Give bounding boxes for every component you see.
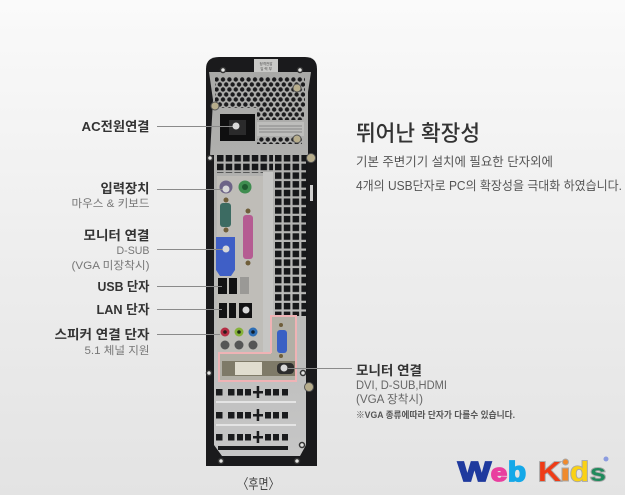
audio jacks <box>220 328 230 336</box>
label: input devices <box>72 181 230 210</box>
logo: Web Kids: e <box>491 460 507 487</box>
I/O panel <box>217 176 263 352</box>
logo: Web Kids: d <box>570 456 589 487</box>
label: LAN: LAN 단자 <box>96 302 150 317</box>
onboard VGA cover <box>216 237 235 276</box>
description: 기본 주변기기 설치에 필요한 단자외에 <box>356 155 553 169</box>
label: card monitor output: 모니터 연결 <box>356 363 422 378</box>
label: USB <box>98 279 222 294</box>
logo: Web Kids: K <box>538 456 561 487</box>
HDMI cover <box>277 363 294 374</box>
card VGA port <box>277 330 287 353</box>
USB ports bottom <box>219 303 227 318</box>
AC socket <box>220 114 255 141</box>
logo: Web Kids: b <box>508 456 526 487</box>
computer rear view: 정격전압 <box>260 61 273 66</box>
description <box>356 155 622 193</box>
computer rear view <box>206 57 317 466</box>
label: USB: USB 단자 <box>98 279 150 294</box>
label: AC power <box>82 119 240 134</box>
caption: rear: 〈후면〉 <box>238 476 280 492</box>
label: monitor D-SUB: (VGA 미장착시) <box>72 259 150 272</box>
label: speaker <box>54 327 220 357</box>
top vent holes <box>215 77 305 108</box>
case screws <box>206 68 306 464</box>
USB ports top <box>218 278 227 294</box>
heading: 뛰어난 확장성 <box>356 121 480 146</box>
DVI port <box>235 362 262 375</box>
label: input devices: 입력장치 <box>100 181 150 196</box>
label: card monitor output: ※VGA 종류에따라 단자가 다를수 있습니다. <box>356 409 515 420</box>
LAN port <box>239 303 252 318</box>
parallel port <box>243 215 253 259</box>
label: AC power: AC전원연결 <box>82 119 150 134</box>
expansion slots <box>216 386 288 450</box>
metal back plate <box>209 72 311 456</box>
label: monitor D-SUB: 모니터 연결 <box>84 228 150 243</box>
serial port <box>220 203 231 227</box>
label: monitor D-SUB: D-SUB <box>116 245 150 257</box>
label: card monitor output: DVI, D-SUB,HDMI <box>356 380 447 392</box>
logo: Web Kids: W <box>458 456 492 487</box>
label: monitor D-SUB <box>72 228 230 272</box>
slot dividers <box>216 402 296 425</box>
logo: Web Kids <box>458 456 608 487</box>
PS/2 ports <box>220 180 232 194</box>
small connector <box>240 277 249 294</box>
case body <box>206 57 317 466</box>
label: LAN <box>96 302 250 317</box>
rating label <box>257 122 304 136</box>
label: speaker: 스피커 연결 단자 <box>54 327 150 342</box>
top label sticker <box>254 59 278 72</box>
label: card monitor output <box>280 363 515 420</box>
graphics card bracket <box>219 316 296 381</box>
label: speaker: 5.1 체널 지원 <box>84 344 150 357</box>
logo: Web Kids: s <box>590 460 606 487</box>
computer rear view: 입 력 부 <box>260 66 273 71</box>
square vent grid <box>217 155 273 173</box>
pink highlight outline <box>219 316 296 381</box>
label: input devices: 마우스 & 키보드 <box>72 197 150 210</box>
label: card monitor output: (VGA 장착시) <box>356 393 423 406</box>
side latch <box>310 185 313 201</box>
